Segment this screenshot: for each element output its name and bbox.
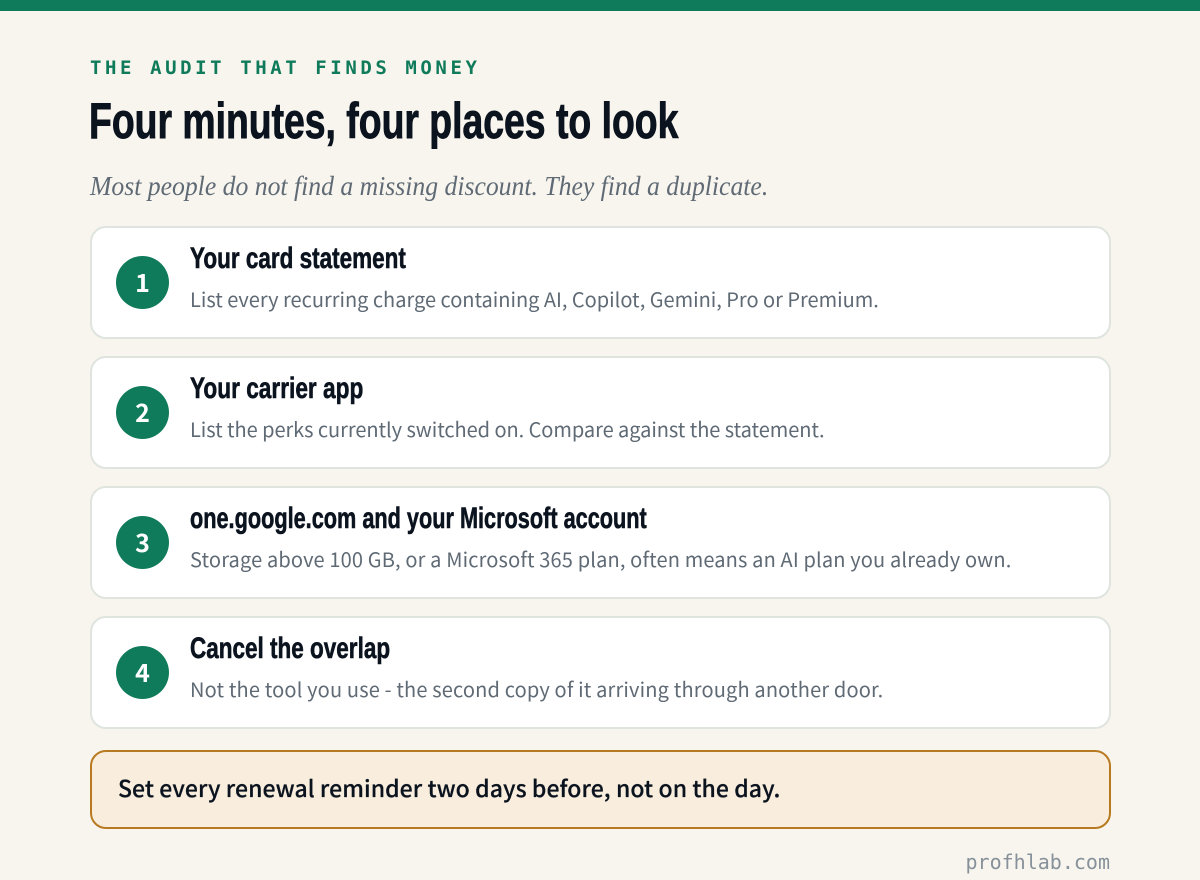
eyebrow label: THE AUDIT THAT FINDS MONEY — [90, 57, 480, 79]
card 4 — [90, 616, 1111, 729]
card 3 body: Storage above 100 GB, or a Microsoft 365 plan, often means an AI plan you already own. — [190, 544, 1011, 573]
top accent bar — [0, 0, 1200, 11]
step number 1: 1 — [135, 264, 150, 300]
step number 3 — [116, 516, 169, 569]
card 1 body: List every recurring charge containing AI, Copilot, Gemini, Pro or Premium. — [190, 284, 879, 313]
card 2 body: List the perks currently switched on. Compare against the statement. — [190, 414, 825, 443]
step number 2: 2 — [135, 394, 150, 430]
callout text: Set every renewal reminder two days before, not on the day. — [118, 770, 780, 804]
card 2 — [90, 356, 1111, 469]
step number 3: 3 — [135, 524, 150, 560]
footer credit: profhlab.com — [966, 850, 1110, 874]
card 4 heading: Cancel the overlap — [190, 632, 390, 665]
card 1 — [90, 226, 1111, 339]
step number 1 — [116, 256, 169, 309]
title: Four minutes, four places to look — [89, 93, 678, 149]
card 1 heading: Your card statement — [190, 242, 406, 275]
card 4 body: Not the tool you use - the second copy of it arriving through another door. — [190, 674, 883, 703]
card 3 — [90, 486, 1111, 599]
card 3 heading: one.google.com and your Microsoft account — [190, 502, 647, 535]
step number 2 — [116, 386, 169, 439]
card 2 heading: Your carrier app — [190, 372, 363, 405]
step number 4 — [116, 646, 169, 699]
subtitle: Most people do not find a missing discount. They find a duplicate. — [90, 171, 768, 201]
step number 4: 4 — [135, 654, 150, 690]
callout — [90, 750, 1111, 829]
